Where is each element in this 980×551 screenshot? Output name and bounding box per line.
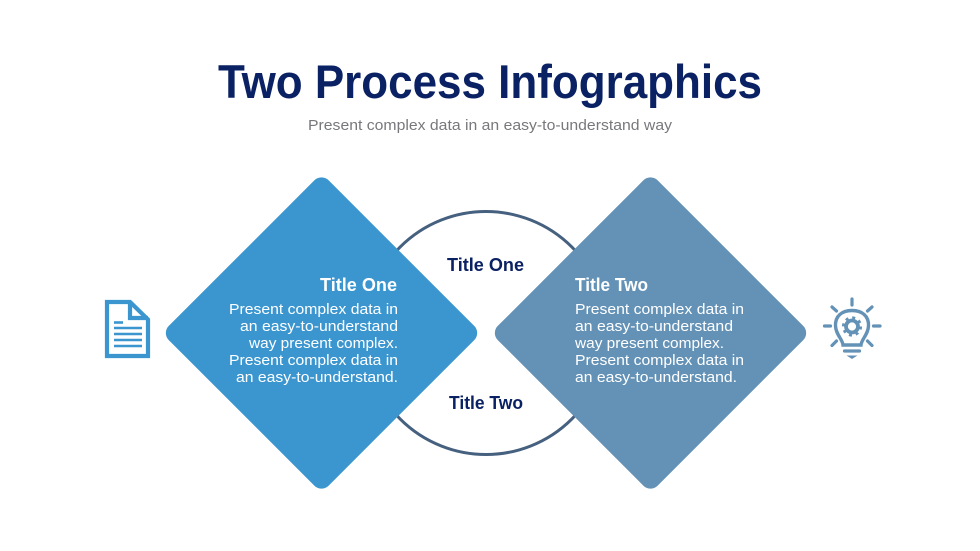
right panel body text: Present complex data in bbox=[575, 302, 744, 318]
right panel body text: an easy-to-understand bbox=[575, 319, 733, 335]
icon: document bbox=[107, 302, 148, 356]
title: Two Process Infographics bbox=[218, 55, 762, 108]
left panel body text: an easy-to-understand. bbox=[236, 370, 398, 386]
circle label: title two: Title Two bbox=[449, 393, 523, 413]
icon: light bulb with gear bbox=[824, 299, 880, 359]
subtitle: Present complex data in an easy-to-understand way bbox=[308, 117, 673, 134]
right panel heading: Title Two bbox=[575, 275, 648, 295]
circle label: title one: Title One bbox=[447, 255, 524, 275]
left panel heading: Title One bbox=[320, 275, 397, 295]
left panel body text bbox=[229, 302, 398, 386]
left panel body text: Present complex data in bbox=[229, 353, 398, 369]
left panel body text: Present complex data in bbox=[229, 302, 398, 318]
right panel body text: Present complex data in bbox=[575, 353, 744, 369]
right panel body text: way present complex. bbox=[574, 336, 724, 352]
diamond shape left bbox=[162, 173, 481, 493]
panel: left diamond bbox=[162, 173, 481, 493]
right panel body text: an easy-to-understand. bbox=[575, 370, 737, 386]
central circle outline bbox=[364, 212, 608, 454]
left panel body text: an easy-to-understand bbox=[240, 319, 398, 335]
diamond shape right bbox=[491, 173, 810, 493]
panel: right diamond bbox=[491, 173, 810, 493]
right panel body text bbox=[574, 302, 744, 386]
left panel body text: way present complex. bbox=[248, 336, 398, 352]
